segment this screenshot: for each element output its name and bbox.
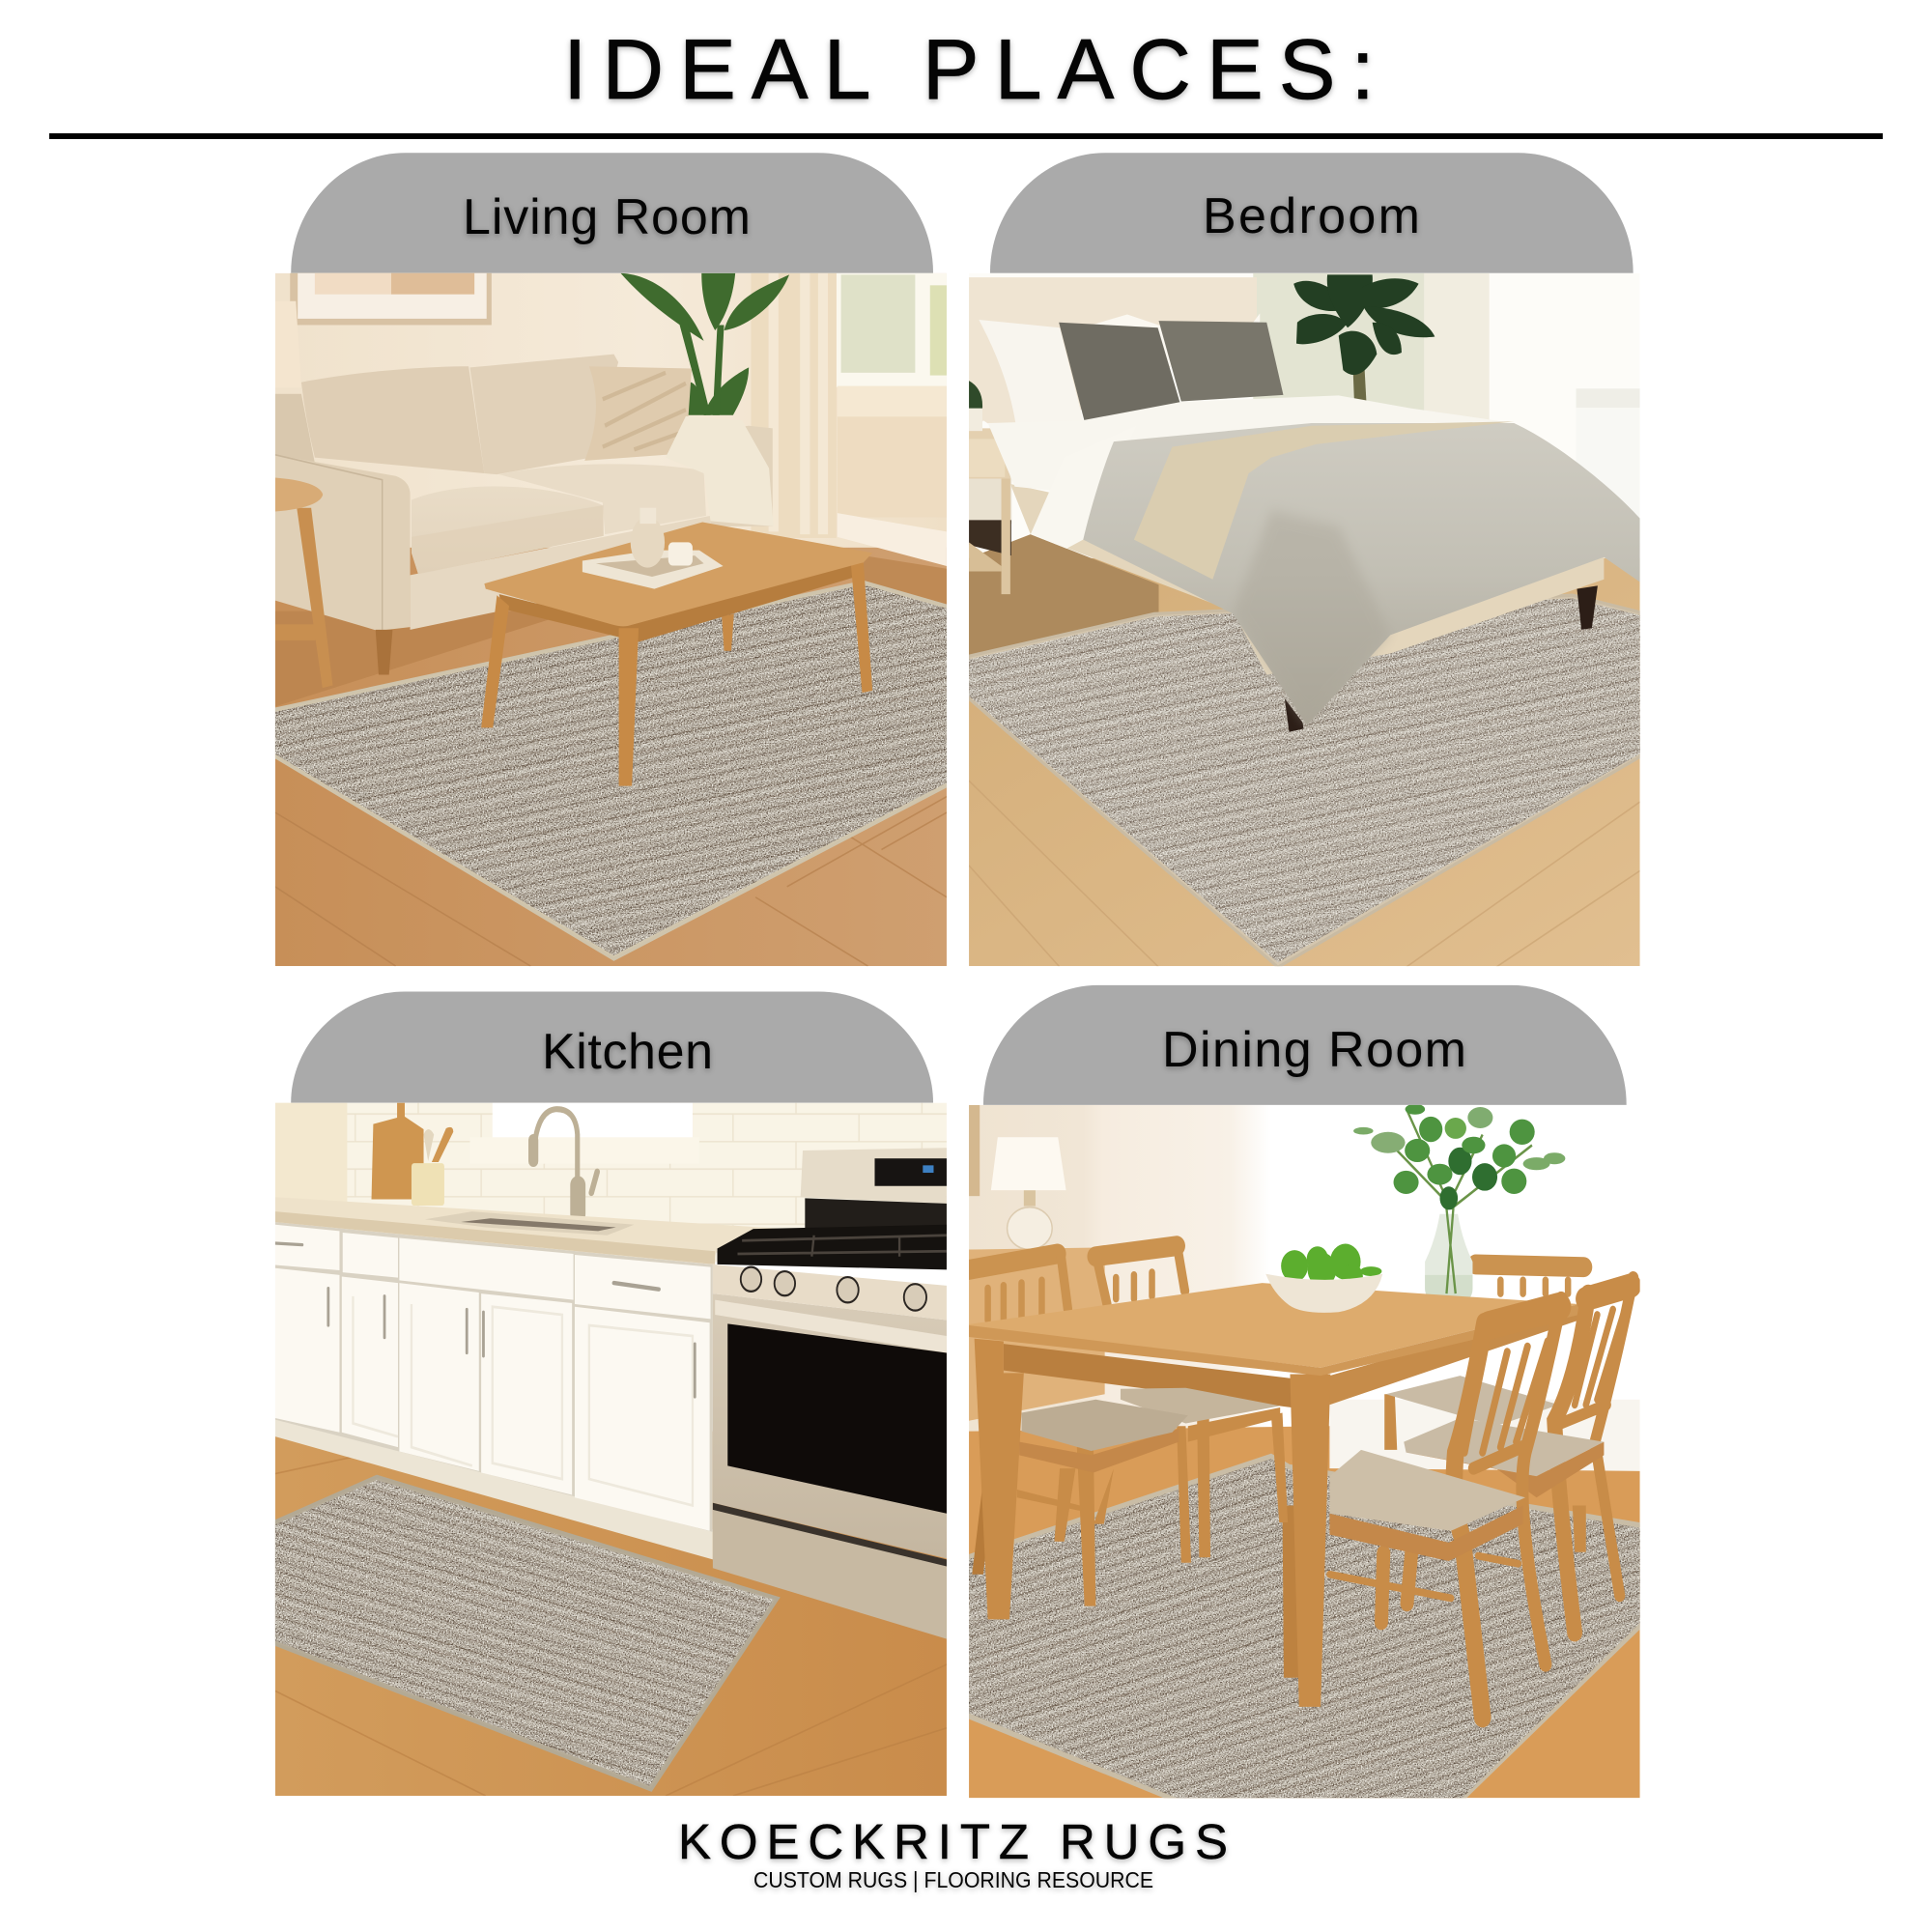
bed legs bbox=[1285, 585, 1598, 732]
countertop and sink bbox=[275, 1197, 805, 1264]
label: bedroom: Bedroom bbox=[1203, 188, 1420, 244]
fruit bowl bbox=[1265, 1244, 1382, 1313]
panel: living room bbox=[275, 153, 947, 966]
window and curtain bbox=[751, 273, 947, 566]
throw blanket bbox=[666, 416, 774, 526]
sideboard bbox=[969, 1247, 1105, 1421]
right chairs bbox=[1329, 1278, 1634, 1718]
plant bbox=[620, 273, 789, 415]
panel: bedroom bbox=[969, 153, 1640, 967]
cutting board and utensils bbox=[372, 1103, 453, 1206]
faucet bbox=[533, 1109, 597, 1214]
back chairs bbox=[969, 1243, 1583, 1321]
rug bbox=[275, 582, 947, 959]
rug bbox=[969, 595, 1640, 967]
brand name: KOECKRITZ RUGS bbox=[678, 1814, 1228, 1869]
photo: kitchen with rug bbox=[275, 1103, 947, 1796]
bedding bbox=[988, 395, 1640, 725]
label: dining room: Dining Room bbox=[1162, 1022, 1466, 1078]
wall art bbox=[290, 272, 492, 325]
toe kick bbox=[275, 1418, 713, 1559]
heading tab: bedroom bbox=[990, 153, 1634, 273]
plant bbox=[1293, 274, 1435, 405]
heading tab: dining room bbox=[983, 985, 1627, 1105]
left front chairs bbox=[1017, 1388, 1288, 1606]
tray and vase bbox=[582, 508, 724, 589]
vase and eucalyptus bbox=[1353, 1104, 1565, 1305]
dining table bbox=[969, 1283, 1579, 1707]
right rear chair base bbox=[1384, 1394, 1586, 1552]
cabinets bbox=[275, 1222, 713, 1532]
rug bbox=[275, 1476, 778, 1790]
tagline: CUSTOM RUGS | FLOORING RESOURCE bbox=[753, 1867, 1153, 1892]
rug bbox=[969, 1455, 1640, 1798]
panel: kitchen bbox=[275, 991, 947, 1796]
stove bbox=[713, 1148, 947, 1639]
label: kitchen: Kitchen bbox=[542, 1024, 713, 1080]
coffee table bbox=[481, 523, 872, 786]
headboard bbox=[969, 277, 1257, 423]
bed frame bbox=[1010, 484, 1604, 674]
nightstand bbox=[969, 381, 1010, 594]
knit throw bbox=[1134, 421, 1514, 580]
wall art and lamp bbox=[969, 1105, 1066, 1250]
lamp shade bbox=[290, 301, 298, 325]
photo: dining room with rug bbox=[969, 1104, 1640, 1798]
heading tab: living room bbox=[291, 153, 933, 273]
side table bbox=[275, 477, 332, 688]
photo: living room with rug bbox=[275, 267, 947, 966]
pillows bbox=[979, 313, 1283, 434]
label: living room: Living Room bbox=[463, 189, 751, 245]
photo: bedroom with rug bbox=[969, 273, 1640, 967]
panel: dining room bbox=[969, 985, 1640, 1798]
heading tab: kitchen bbox=[291, 991, 933, 1103]
title: IDEAL PLACES: bbox=[563, 21, 1375, 117]
sofa bbox=[275, 355, 773, 674]
pillow bbox=[584, 366, 692, 461]
